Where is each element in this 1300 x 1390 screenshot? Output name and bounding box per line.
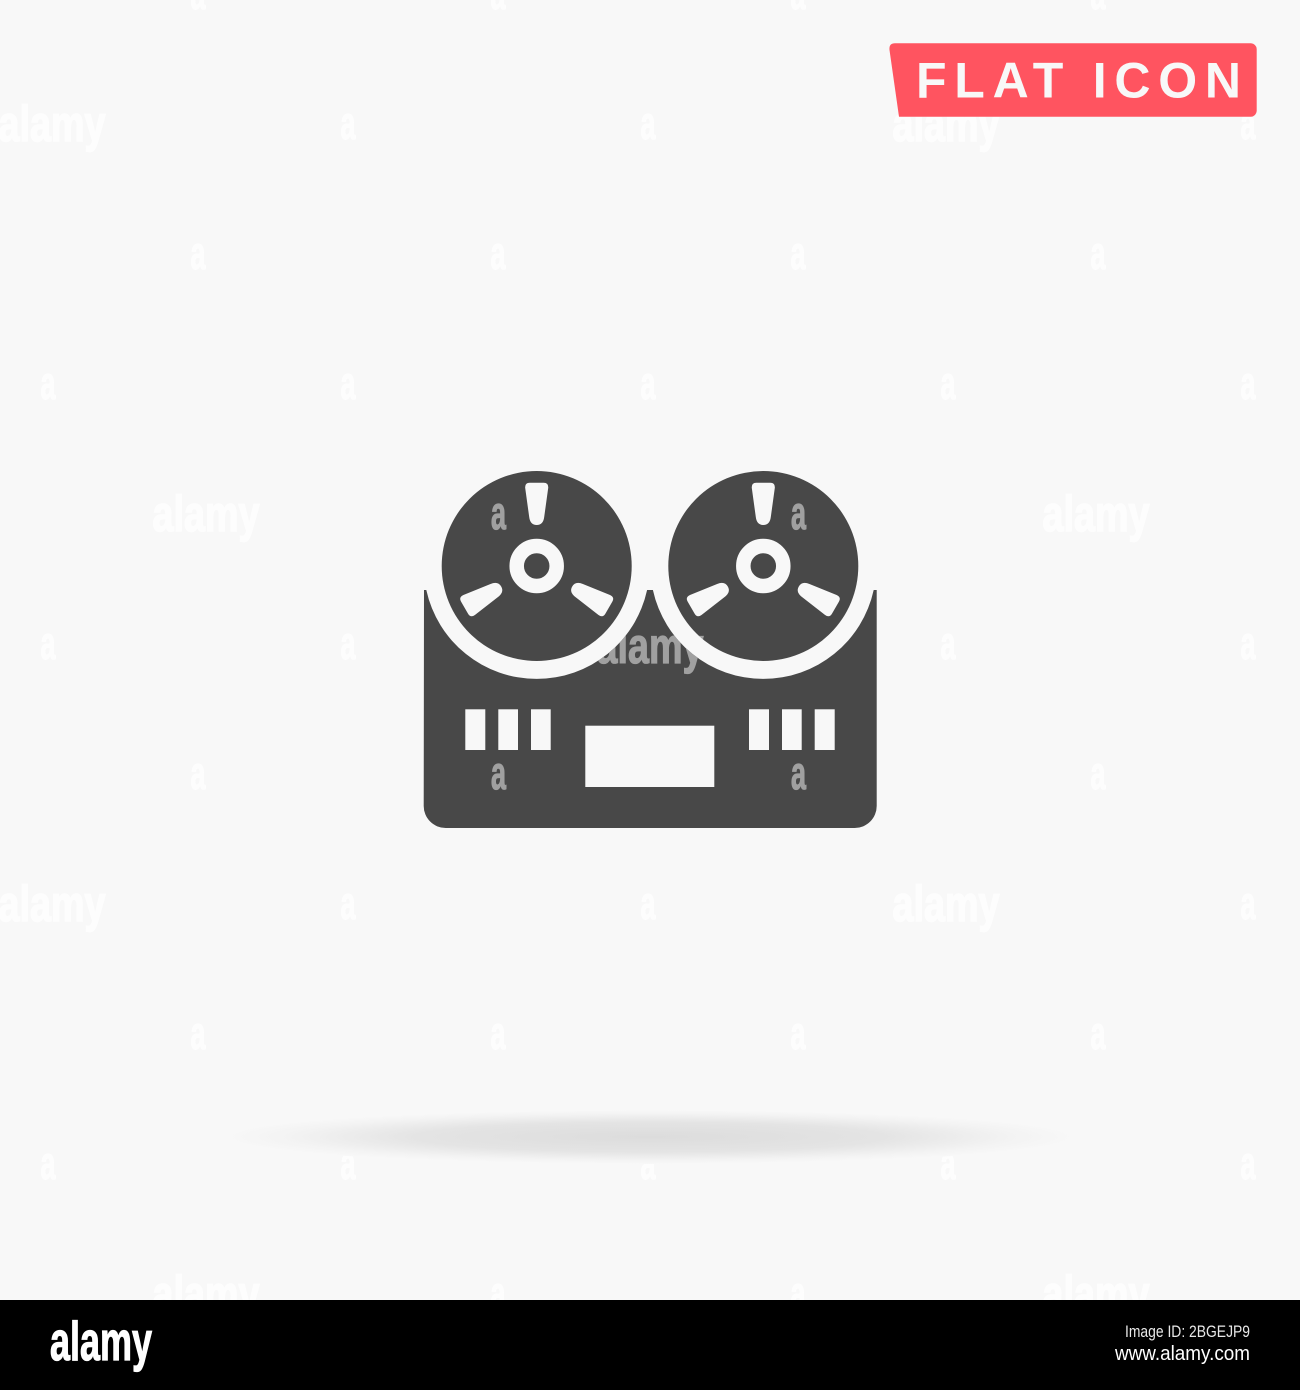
watermark over icon — [491, 487, 806, 799]
watermark pattern: a — [340, 877, 356, 929]
footer bar — [0, 1300, 1300, 1390]
watermark over icon: a — [791, 747, 806, 799]
watermark pattern: alamy — [892, 876, 1000, 932]
badge label: FLAT ICON — [916, 52, 1241, 108]
watermark over icon: a — [491, 747, 506, 799]
watermark pattern: a — [1090, 747, 1106, 799]
right reel — [668, 471, 858, 661]
watermark pattern: a — [940, 617, 956, 669]
watermark pattern: a — [1240, 357, 1256, 409]
watermark pattern: a — [1240, 617, 1256, 669]
watermark pattern: a — [190, 227, 206, 279]
watermark pattern: a — [1240, 97, 1256, 149]
watermark pattern: a — [340, 97, 356, 149]
watermark pattern: a — [790, 227, 806, 279]
watermark pattern: a — [640, 1137, 656, 1189]
watermark pattern: alamy — [152, 486, 260, 542]
watermark pattern: a — [790, 1267, 806, 1319]
flat icon badge — [889, 43, 1257, 117]
watermark pattern: a — [940, 1137, 956, 1189]
watermark pattern: a — [640, 357, 656, 409]
watermark pattern: a — [490, 227, 506, 279]
footer logo: alamy — [50, 1310, 152, 1372]
image id: Image ID: 2BGEJP9 — [1125, 1322, 1250, 1341]
watermark pattern: a — [40, 1137, 56, 1189]
watermark pattern: a — [40, 617, 56, 669]
watermark pattern: a — [1240, 1137, 1256, 1189]
watermark pattern: a — [190, 1007, 206, 1059]
recorder body — [424, 590, 877, 828]
watermark pattern: a — [790, 1007, 806, 1059]
display window — [585, 726, 714, 787]
watermark pattern: a — [340, 617, 356, 669]
watermark pattern: alamy — [1042, 486, 1150, 542]
watermark pattern: a — [640, 97, 656, 149]
watermark pattern: a — [340, 1137, 356, 1189]
watermark pattern: alamy — [0, 876, 106, 932]
left reel — [442, 471, 632, 661]
website: www.alamy.com — [1114, 1343, 1250, 1365]
left control buttons — [465, 709, 551, 750]
watermark pattern: a — [490, 1267, 506, 1319]
watermark pattern: a — [1090, 1007, 1106, 1059]
watermark over icon: a — [791, 487, 806, 539]
watermark pattern: a — [1090, 227, 1106, 279]
badge shape — [889, 43, 1257, 117]
watermark pattern: alamy — [152, 1266, 260, 1322]
watermark pattern: a — [190, 747, 206, 799]
watermark over icon: alamy — [596, 618, 704, 674]
watermark pattern: a — [340, 357, 356, 409]
watermark pattern: a — [1240, 877, 1256, 929]
right control buttons — [749, 709, 835, 750]
ground shadow — [225, 1110, 1075, 1164]
icon: reel-to-reel tape recorder — [424, 471, 877, 828]
watermark pattern: a — [940, 357, 956, 409]
watermark over icon: a — [491, 487, 506, 539]
watermark pattern: alamy — [892, 96, 1000, 152]
watermark pattern: a — [40, 357, 56, 409]
watermark pattern: a — [640, 877, 656, 929]
watermark pattern: alamy — [0, 96, 106, 152]
watermark pattern: alamy — [1042, 1266, 1150, 1322]
watermark pattern: a — [490, 1007, 506, 1059]
